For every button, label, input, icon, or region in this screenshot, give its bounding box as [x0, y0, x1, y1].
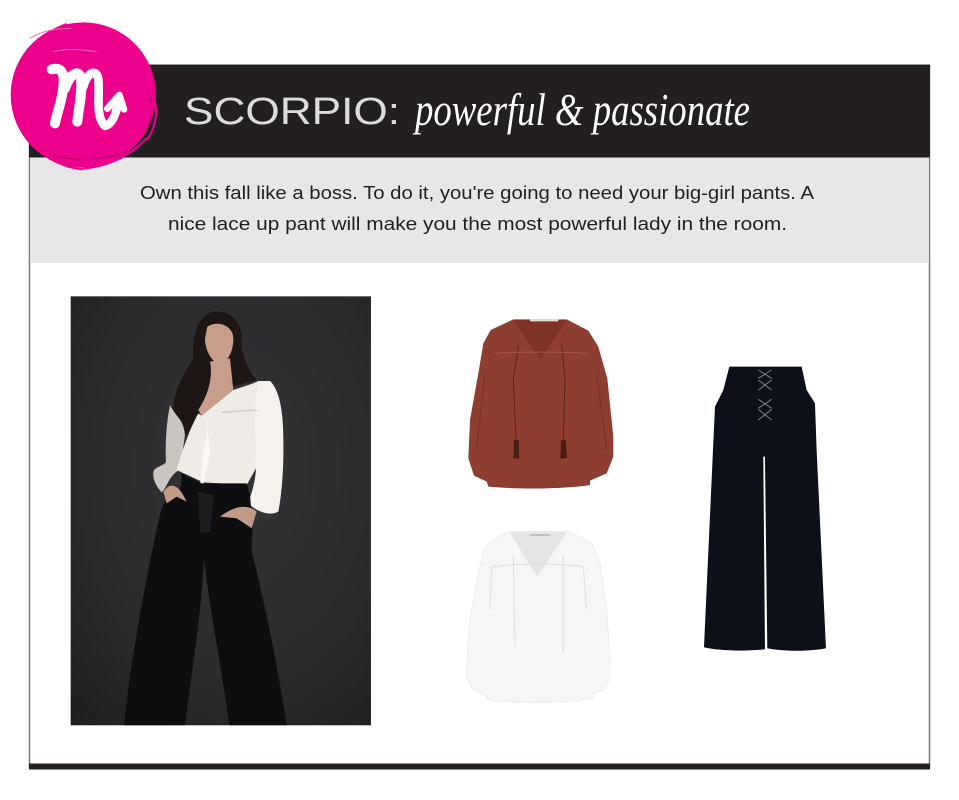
blouse ties	[477, 345, 607, 450]
product: black lace-up trousers	[704, 367, 826, 651]
model blouse	[153, 381, 283, 514]
panel: model photo	[71, 296, 371, 725]
text block: intro: Own this fall like a boss. To do it, you're going to need your big-girl pants. A	[140, 183, 814, 203]
bottom bar	[29, 764, 930, 770]
panel: header bar	[29, 65, 930, 158]
text block: intro: nice lace up pant will make you the most powerful lady in the room.	[168, 214, 787, 234]
model hair	[171, 311, 257, 441]
heading: title	[184, 84, 750, 135]
icon: pink brush circle with scorpio symbol	[11, 22, 156, 169]
model face and neck	[198, 324, 233, 416]
heading: title: SCORPIO:	[184, 91, 400, 133]
white blouse ties	[490, 555, 587, 653]
icon: scorpio glyph	[52, 69, 124, 126]
product: rust blouse	[468, 319, 613, 488]
panel: intro text band	[30, 158, 929, 263]
heading: title: powerful & passionate	[413, 84, 750, 135]
product: white blouse	[467, 532, 610, 702]
text block: intro	[140, 183, 814, 234]
model hands	[163, 486, 257, 528]
trouser lacing	[758, 370, 772, 420]
model trousers	[124, 473, 287, 725]
